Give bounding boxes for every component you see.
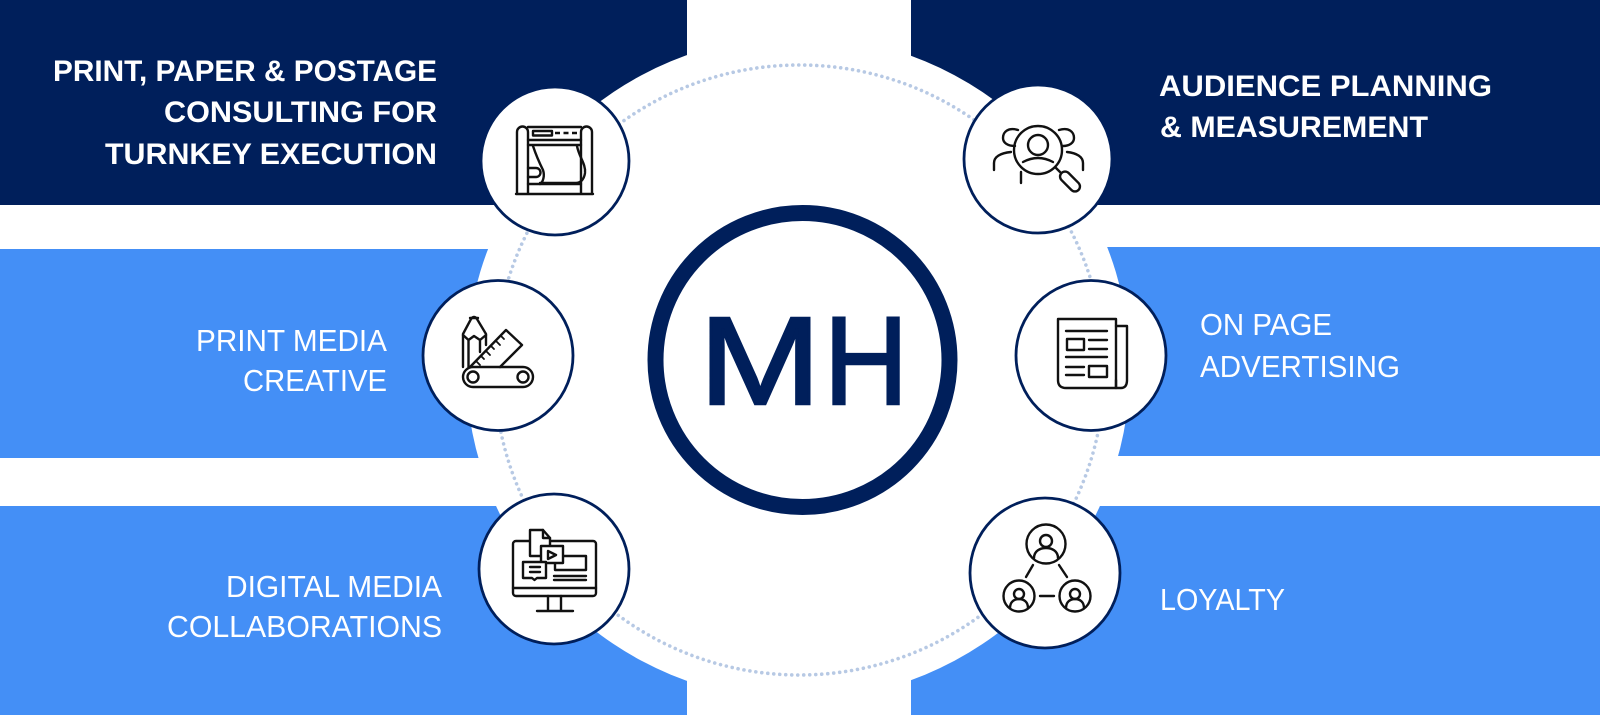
panel: audience planning bar [911, 0, 1600, 205]
icon: digital media monitor node [479, 494, 629, 644]
label: on page advertising: ADVERTISING [1200, 349, 1400, 384]
icon: loyalty network node [970, 498, 1120, 648]
heading: print paper postage: PRINT, PAPER & POSTAGE [53, 55, 437, 88]
heading: audience planning: & MEASUREMENT [1160, 111, 1428, 144]
label: on page advertising: ON PAGE [1200, 307, 1332, 342]
dotted orbit ring [494, 65, 1104, 675]
central white disc [466, 36, 1130, 700]
label: print media creative: PRINT MEDIA [196, 323, 387, 358]
panel: digital media bar [0, 506, 687, 715]
heading: print paper postage: CONSULTING FOR [164, 96, 437, 129]
label: digital media collaborations [167, 569, 442, 644]
heading: print paper postage [53, 55, 437, 171]
panel: loyalty bar [911, 506, 1600, 715]
icon: newspaper node [1016, 280, 1166, 430]
icon: pencil and ruler node [423, 280, 573, 430]
panel: on page advertising bar [911, 247, 1600, 456]
label: print media creative: CREATIVE [243, 363, 387, 398]
heading: audience planning [1159, 70, 1492, 144]
heading: audience planning: AUDIENCE PLANNING [1159, 70, 1492, 103]
label: digital media collaborations: DIGITAL MEDIA [226, 569, 442, 604]
label: digital media collaborations: COLLABORATIONS [167, 609, 442, 644]
central MH logo [656, 213, 950, 507]
panel: print media creative bar [0, 249, 687, 458]
label: loyalty: LOYALTY [1160, 582, 1285, 617]
label: print media creative [196, 323, 387, 398]
icon: audience search node [964, 85, 1112, 233]
label: on page advertising [1200, 307, 1400, 384]
icon: printer node [481, 87, 629, 235]
panel: print paper postage bar [0, 0, 687, 205]
heading: print paper postage: TURNKEY EXECUTION [105, 138, 437, 171]
central MH logo: H [824, 292, 908, 431]
central MH logo: M [699, 292, 821, 431]
